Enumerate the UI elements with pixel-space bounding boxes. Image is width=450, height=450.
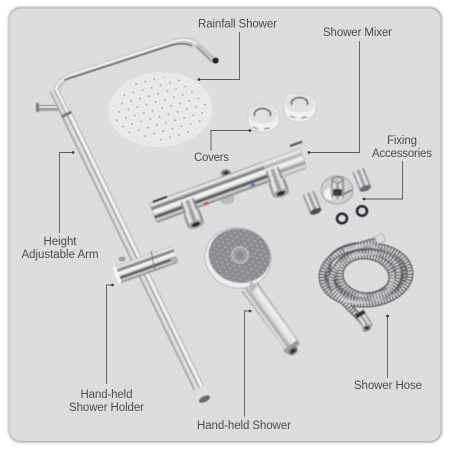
rod: [61, 111, 209, 402]
label: fixing accessories: Accessories: [372, 148, 432, 160]
icon: shower mixer: [149, 141, 307, 231]
label: covers: Covers: [194, 152, 229, 164]
right leg: [264, 166, 290, 200]
label: hand-held shower holder: Hand-held: [80, 389, 132, 401]
label: hand-held shower: [197, 310, 291, 432]
body: [149, 148, 307, 223]
side stub: [37, 104, 59, 111]
icon: hand-held shower holder: [112, 246, 179, 284]
label: shower hose: Shower Hose: [354, 380, 422, 392]
body cap section: [262, 148, 307, 182]
icon: rainfall shower head: [107, 69, 214, 150]
icon: shower hose: [320, 240, 412, 322]
label: fixing accessories: Fixing: [387, 135, 417, 147]
label: rainfall shower: Rainfall Shower: [198, 18, 277, 30]
label: height adjustable arm: Height: [44, 236, 77, 248]
icon: hand-held shower: [199, 222, 301, 357]
label: covers: [194, 129, 251, 164]
icon: covers: [248, 93, 316, 132]
icon: fixing accessories: [303, 168, 372, 223]
label: hand-held shower holder: [69, 284, 144, 414]
label: hand-held shower: Hand-held Shower: [197, 420, 291, 432]
label: shower mixer: [308, 27, 392, 154]
centre port: [220, 174, 232, 184]
label: shower hose: [354, 315, 422, 392]
rod end: [194, 385, 209, 401]
label: shower mixer: Shower Mixer: [323, 27, 392, 39]
icon: hose connectors: [355, 233, 386, 333]
label: rainfall shower: [198, 18, 277, 81]
label: height adjustable arm: Adjustable Arm: [22, 249, 98, 261]
label: height adjustable arm: [22, 151, 98, 261]
bottom outlet: [220, 193, 234, 204]
icon: height adjustable arm with overhead pipe: [36, 40, 219, 404]
label: fixing accessories: [363, 135, 432, 200]
label: hand-held shower holder: Shower Holder: [69, 402, 144, 414]
left leg: [179, 197, 205, 231]
joint: [50, 88, 70, 117]
